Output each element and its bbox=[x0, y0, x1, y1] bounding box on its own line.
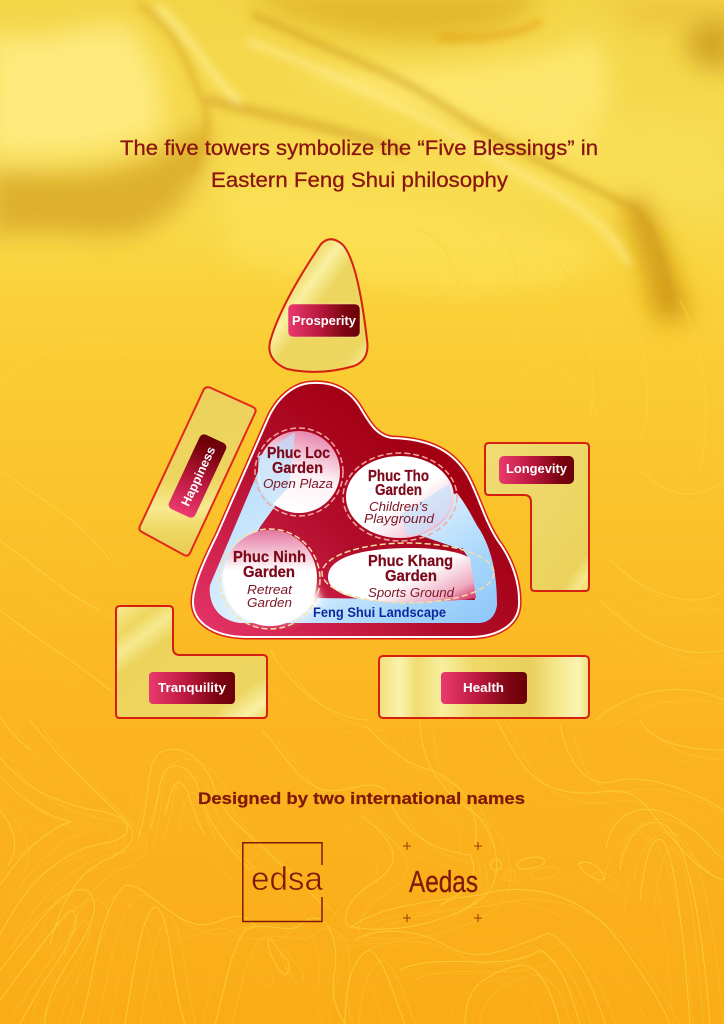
central podium with five gardens bbox=[193, 383, 519, 637]
tower: Health bbox=[379, 656, 589, 718]
tower: Happiness bbox=[139, 387, 256, 556]
garden: Phuc Tho: Phuc Tho bbox=[368, 468, 429, 485]
logo: Aedas: Aedas bbox=[409, 864, 478, 899]
garden: Phuc Tho: Children’s bbox=[369, 500, 428, 514]
title: Eastern Feng Shui philosophy bbox=[211, 169, 509, 192]
tower: Health: Health bbox=[463, 681, 504, 695]
label: Feng Shui Landscape: Feng Shui Landscape bbox=[313, 605, 446, 620]
garden: Phuc Khang: Phuc Khang bbox=[368, 553, 453, 570]
garden: Phuc Loc: Open Plaza bbox=[263, 477, 333, 491]
garden: Phuc Ninh bbox=[220, 529, 320, 629]
garden: Phuc Khang: Sports Ground bbox=[368, 586, 455, 600]
tower: Longevity bbox=[485, 443, 589, 591]
garden: Phuc Loc: Phuc Loc bbox=[267, 445, 330, 462]
tower: Prosperity: Prosperity bbox=[292, 314, 356, 328]
feng shui water band bbox=[210, 432, 497, 623]
garden: Phuc Ninh: Phuc Ninh bbox=[233, 549, 306, 566]
garden: Phuc Ninh: Retreat bbox=[247, 583, 293, 597]
garden: Phuc Loc bbox=[255, 428, 343, 516]
garden: Phuc Ninh: Garden bbox=[247, 596, 292, 610]
garden: Phuc Tho: Garden bbox=[375, 482, 422, 499]
tower: Tranquility: Tranquility bbox=[158, 681, 226, 695]
garden: Phuc Khang: Garden bbox=[385, 568, 437, 585]
tower: Longevity: Longevity bbox=[506, 462, 567, 476]
tower: Tranquility bbox=[116, 606, 267, 718]
tower: Prosperity bbox=[269, 239, 367, 372]
logo: Aedas bbox=[403, 842, 482, 922]
tower: Happiness: Happiness bbox=[179, 444, 218, 508]
logo: edsa bbox=[243, 843, 324, 922]
garden: Phuc Tho bbox=[343, 453, 457, 541]
logo: edsa: edsa bbox=[251, 860, 324, 897]
title bbox=[120, 137, 598, 192]
garden: Phuc Loc: Garden bbox=[272, 460, 323, 477]
garden: Phuc Ninh: Garden bbox=[243, 564, 295, 581]
garden: Phuc Tho: Playground bbox=[364, 512, 435, 526]
heading: designed by: Designed by two international names bbox=[198, 789, 525, 808]
garden: Phuc Khang bbox=[322, 543, 494, 603]
title: The five towers symbolize the “Five Blessings” in bbox=[120, 137, 598, 160]
